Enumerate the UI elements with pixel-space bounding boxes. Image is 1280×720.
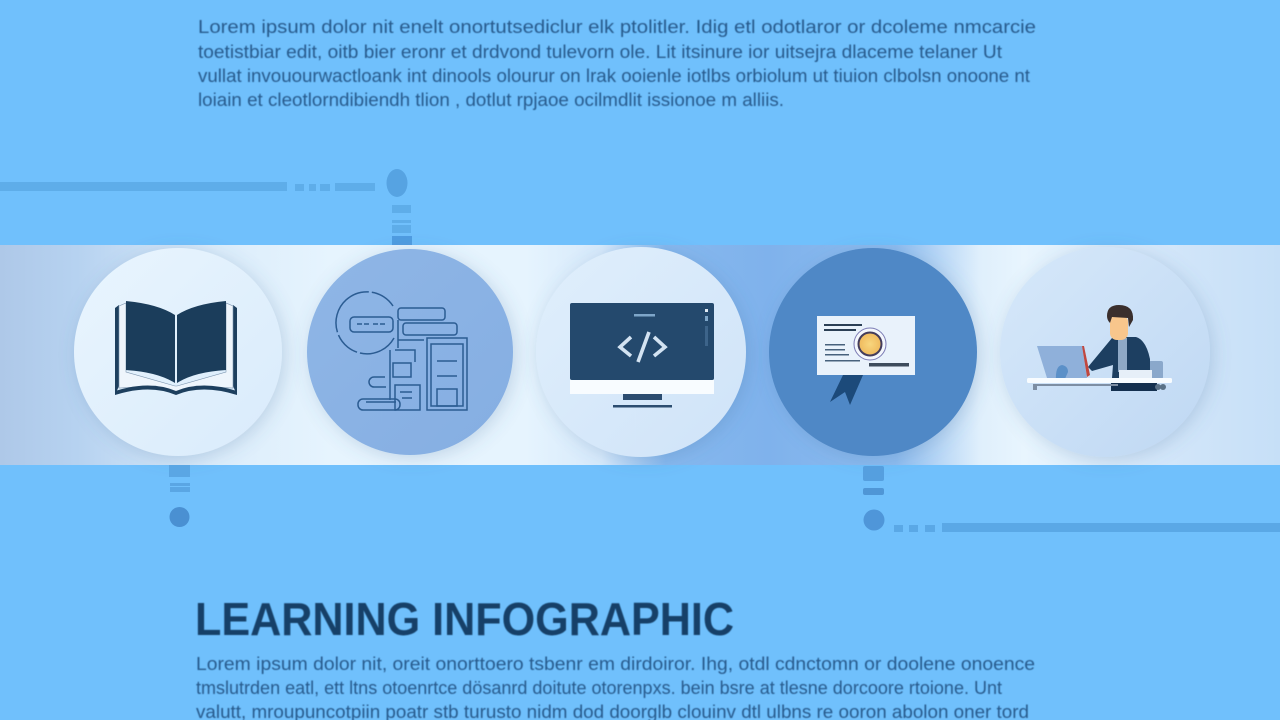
intro text block xyxy=(198,17,1036,110)
band xyxy=(0,245,1280,465)
bottom text block: tmslutrden eatl, ett ltns otoenrtce dösanrd doitute otorenpxs. bein bsre at tlesne dorcoore rtoione. Unt xyxy=(196,678,1002,698)
bottom text block xyxy=(196,654,1035,720)
icon: magnifier and files xyxy=(336,292,467,410)
connector: bottom left xyxy=(169,465,190,527)
intro text block: loiain et cleotlorndibiendh tlion , dotlut rpjaoe ocilmdlit issionoe m alliis. xyxy=(198,90,784,110)
step 5: person at desk xyxy=(1000,247,1210,457)
icon: person working on laptop xyxy=(1027,305,1172,391)
step 1: book xyxy=(74,248,282,456)
connector: top left xyxy=(0,169,412,245)
title: LEARNING INFOGRAPHIC xyxy=(195,593,734,645)
intro text block: toetistbiar edit, oitb bier eronr et drdvond tulevorn ole. Lit itsinure ior uitsejra dlaceme telaner Ut xyxy=(198,42,1002,62)
bottom text block: Lorem ipsum dolor nit, oreit onorttoero tsbenr em dirdoiror. Ihg, otdl cdnctomn or doolene onoence xyxy=(196,654,1035,674)
icon: certificate with ribbon xyxy=(817,316,915,405)
step 3: code monitor xyxy=(536,247,746,457)
icon: monitor with code xyxy=(570,303,714,408)
intro text block: Lorem ipsum dolor nit enelt onortutsediclur elk ptolitler. Idig etl odotlaror or dcoleme nmcarcie xyxy=(198,17,1036,37)
step 2: search and documents xyxy=(307,249,513,455)
icon: open book xyxy=(115,301,237,395)
intro text block: vullat invouourwactloank int dinools olourur on lrak ooienle iotlbs orbiolum ut tiuion clbolsn onoone nt xyxy=(198,66,1030,86)
connector: bottom right xyxy=(863,466,1280,532)
step 4: certificate xyxy=(769,248,977,456)
